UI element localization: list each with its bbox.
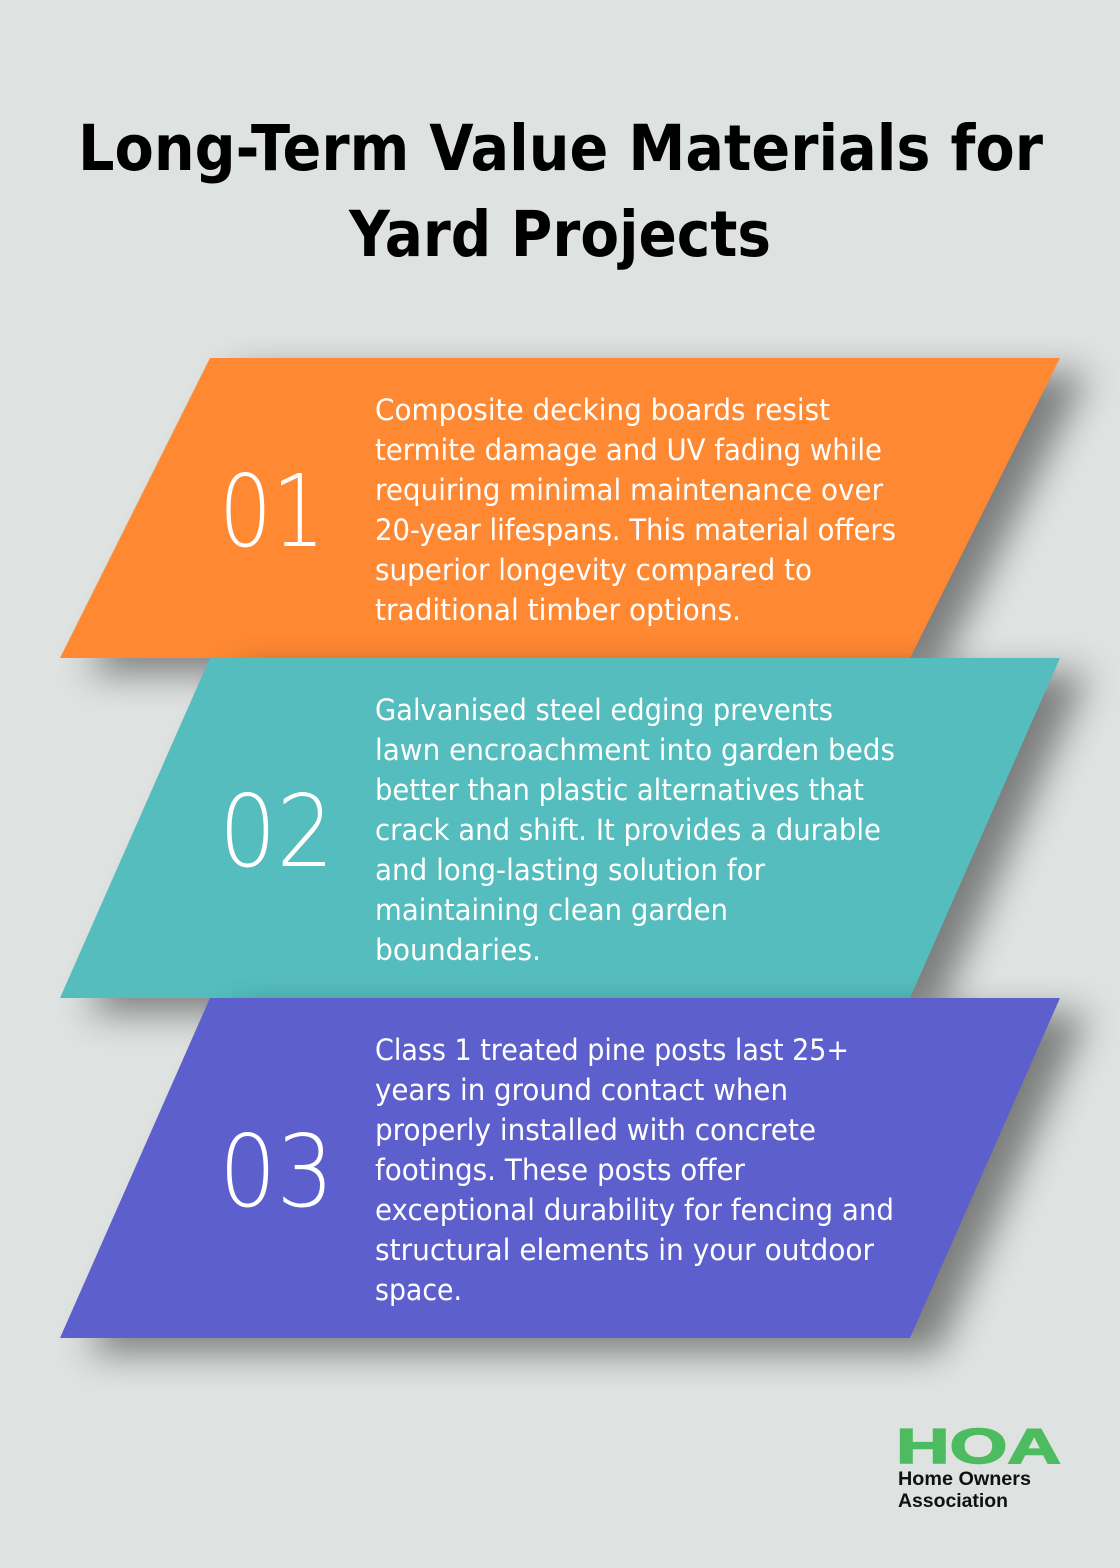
panel 2 text: Galvanised steel edging prevents xyxy=(375,693,833,727)
panel 2 text: better than plastic alternatives that xyxy=(375,773,864,807)
panel 3 number: 03 xyxy=(219,1113,334,1230)
logo: HOA Home Owners Association: Home Owners xyxy=(898,1468,1031,1490)
panel 2 text: boundaries. xyxy=(375,933,541,967)
panel 1 text: termite damage and UV fading while xyxy=(375,433,882,467)
panel 2 text: and long-lasting solution for xyxy=(375,853,766,887)
panel 3: treated pine posts xyxy=(60,998,1088,1353)
logo: HOA Home Owners Association: HOA xyxy=(896,1420,1061,1474)
panel 2 number: 02 xyxy=(219,773,334,890)
panel 1 text: traditional timber options. xyxy=(375,593,741,627)
panel 1 number: 01 xyxy=(219,453,325,570)
panel 3 text: structural elements in your outdoor xyxy=(375,1233,875,1267)
logo: HOA Home Owners Association: Association xyxy=(898,1490,1008,1512)
title: Yard Projects xyxy=(348,198,771,271)
panel 3 text: Class 1 treated pine posts last 25+ xyxy=(375,1033,849,1067)
panel 2 shape xyxy=(60,658,1060,998)
panel 3 text xyxy=(375,1033,894,1307)
logo: HOA Home Owners Association xyxy=(896,1420,1061,1512)
panel 2 text: maintaining clean garden xyxy=(375,893,728,927)
panel 2 text: lawn encroachment into garden beds xyxy=(375,733,895,767)
panel 1 text: superior longevity compared to xyxy=(375,553,812,587)
panel 2 text: crack and shift. It provides a durable xyxy=(375,813,881,847)
panel 1 text xyxy=(375,393,896,627)
panel 1: composite decking xyxy=(60,358,1088,673)
panel 3 text: properly installed with concrete xyxy=(375,1113,816,1147)
panel 1 text: requiring minimal maintenance over xyxy=(375,473,884,507)
panel 1 text: Composite decking boards resist xyxy=(375,393,830,427)
panel 3 shape xyxy=(60,998,1060,1338)
panel 3 text: space. xyxy=(375,1273,462,1307)
panel 3 text: exceptional durability for fencing and xyxy=(375,1193,894,1227)
panel 1 shape xyxy=(60,358,1060,658)
panel 3 text: years in ground contact when xyxy=(375,1073,788,1107)
title xyxy=(78,112,1043,271)
panel 1 text: 20-year lifespans. This material offers xyxy=(375,513,896,547)
title: Long-Term Value Materials for xyxy=(78,112,1043,185)
panel 2 text xyxy=(375,693,895,967)
panel 3 text: footings. These posts offer xyxy=(375,1153,746,1187)
panel 2: galvanised steel edging xyxy=(60,658,1088,1013)
